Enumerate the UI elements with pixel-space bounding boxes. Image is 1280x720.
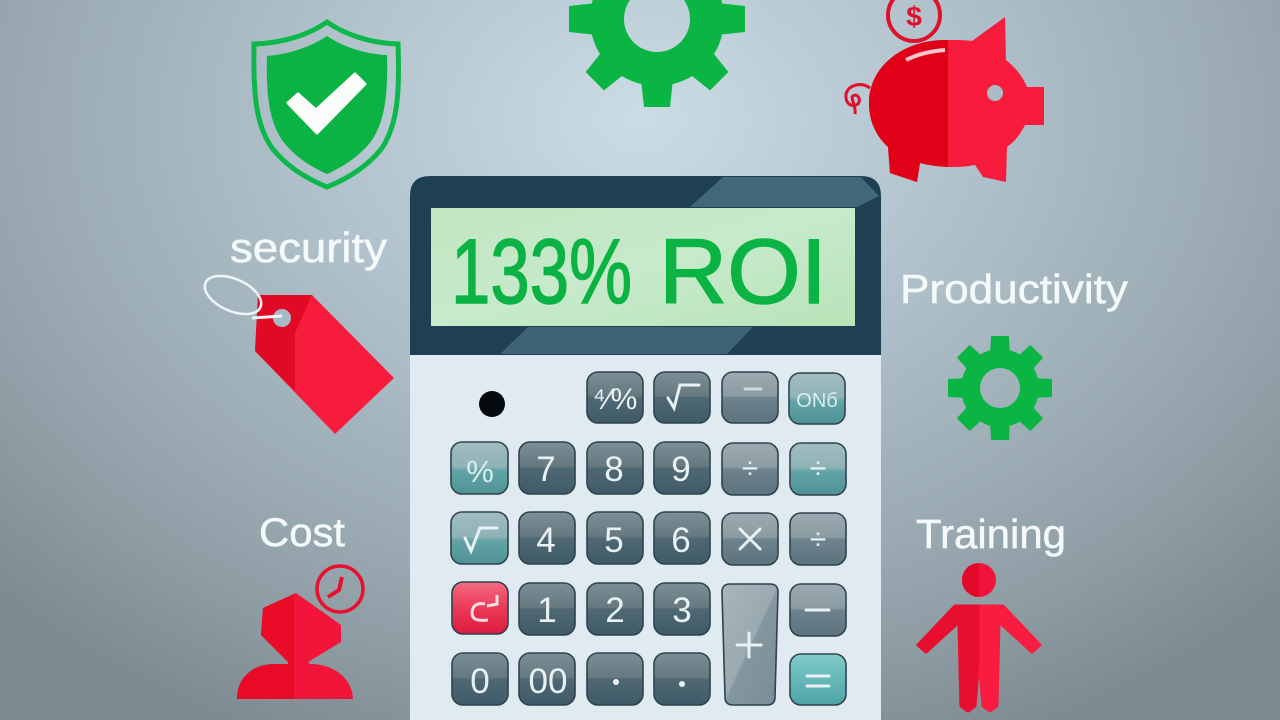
display value: 133% ROI: ROI: [659, 221, 827, 323]
row 4: [452, 653, 846, 705]
icon: red standing person: [918, 563, 1040, 711]
row 1: 8: [604, 450, 624, 489]
icon: red person with clock: [237, 566, 363, 699]
coin: [888, 0, 940, 41]
row 2: ÷: [810, 523, 826, 556]
keypad: [451, 372, 846, 705]
row 2: 6: [671, 521, 691, 560]
label: Cost: Cost: [259, 511, 345, 555]
row 1: %: [466, 454, 494, 489]
row 3: 3: [672, 591, 692, 630]
row 1: 7: [536, 450, 556, 489]
row 0: [587, 372, 845, 424]
label: Productivity: Productivity: [900, 266, 1129, 312]
indicator dot: [479, 391, 505, 417]
row 3: 1: [537, 591, 557, 630]
row 3: 2: [605, 591, 625, 630]
icon: red piggy bank with coin: [846, 0, 1044, 182]
LCD screen: [431, 208, 855, 326]
row 1: [451, 442, 846, 495]
row 2: 4: [536, 521, 556, 560]
row 2: [451, 512, 846, 565]
tall plus key: [722, 584, 778, 705]
label: security: security: [230, 224, 387, 271]
icon: green shield with check mark: [254, 22, 399, 187]
row 4: 0: [470, 662, 490, 701]
row 3: [452, 582, 846, 636]
row 2: 5: [604, 521, 624, 560]
row 4: 00: [529, 662, 567, 701]
label: Training: Training: [916, 511, 1066, 557]
coin: $: [906, 1, 922, 32]
calculator: [410, 176, 881, 720]
row 1: ÷: [742, 452, 758, 485]
display value: 133% ROI: 133%: [451, 221, 632, 323]
row 0: ⁴⁄%: [593, 383, 637, 416]
row 1: ÷: [810, 452, 826, 485]
row 0: ONб: [796, 390, 838, 412]
calculator body: [410, 340, 881, 720]
icon: red price tag: [199, 268, 394, 434]
icon: small green gear: [948, 336, 1052, 440]
calculator display housing: [410, 176, 881, 355]
icon: large green gear: [569, 0, 745, 107]
row 1: 9: [671, 450, 691, 489]
